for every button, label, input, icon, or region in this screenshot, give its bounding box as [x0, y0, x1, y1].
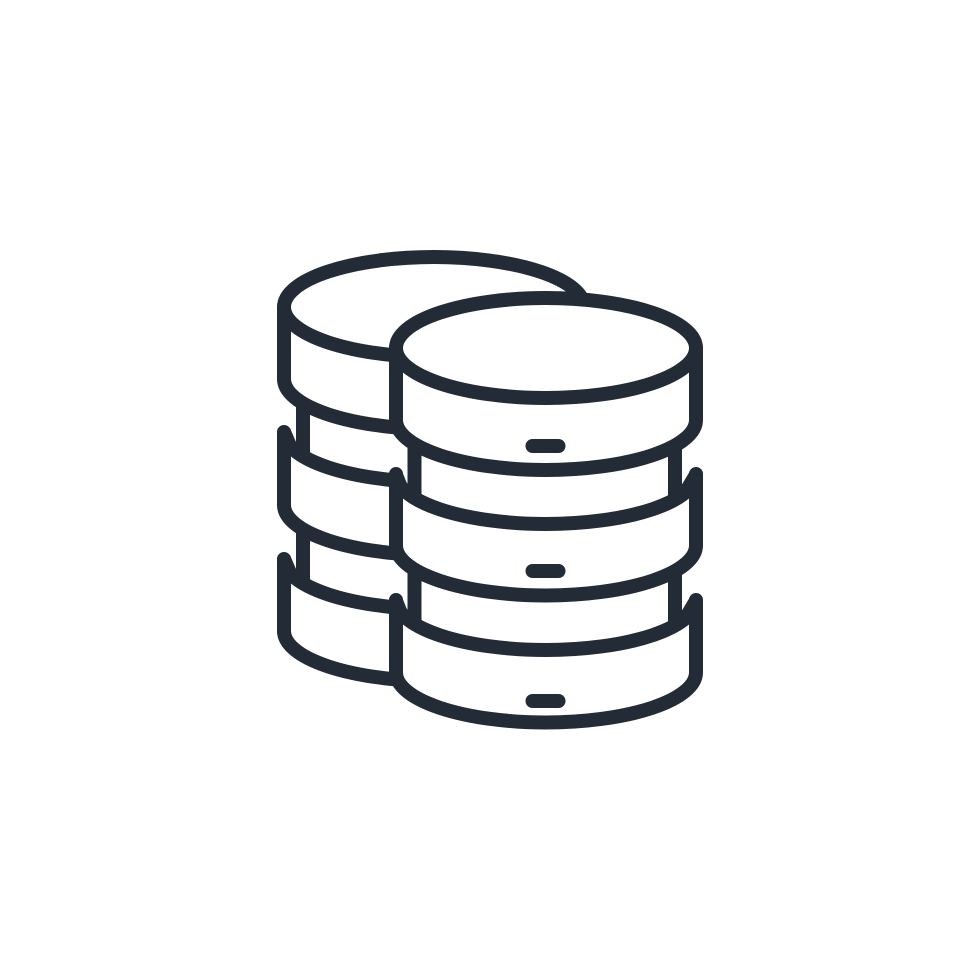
front stack connectors [414, 444, 675, 624]
front stack middle tier outline [396, 474, 696, 596]
front stack bottom tier [396, 600, 696, 722]
icon: database server stacks [277, 250, 703, 730]
front stack bottom tier outline [396, 600, 696, 722]
tick fillets [402, 471, 690, 625]
front stack top tier [396, 348, 696, 470]
back database stack [284, 257, 584, 681]
back stack top disk [284, 257, 584, 357]
front stack middle tier [396, 474, 696, 596]
front stack top disk [396, 298, 696, 398]
front database stack [396, 298, 696, 722]
back stack tiers [277, 304, 394, 686]
indicator slots [532, 446, 558, 701]
